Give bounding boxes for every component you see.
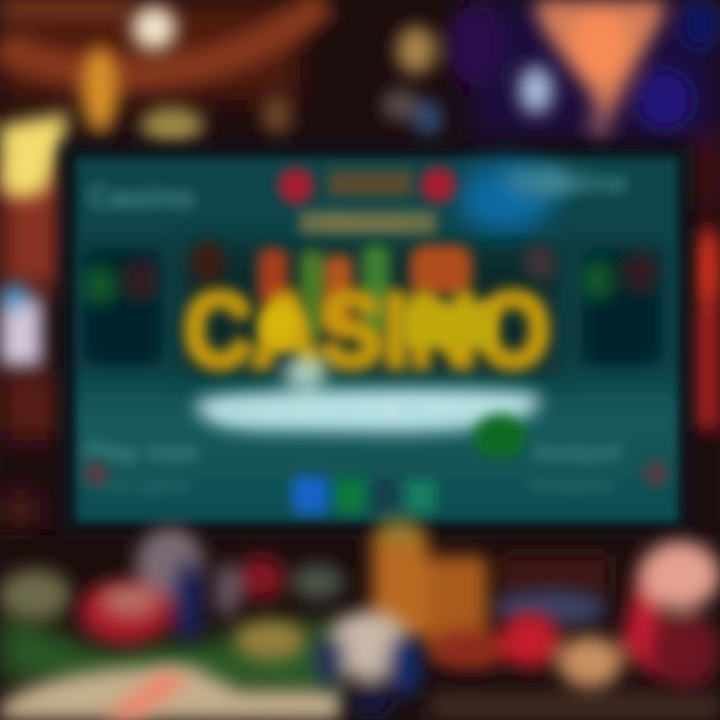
monitor screen xyxy=(60,145,690,535)
lower right text: Jackpot xyxy=(530,439,621,466)
blue glow at top right of screen xyxy=(459,164,551,236)
table surface xyxy=(0,535,720,720)
flame-shaped lamp xyxy=(535,0,720,140)
left side pink panel xyxy=(0,284,42,366)
header title xyxy=(300,170,436,238)
monitor screen: Online xyxy=(540,167,627,198)
orange chip stack xyxy=(372,518,488,656)
monitor screen: Free spins xyxy=(90,475,190,497)
figures above logo xyxy=(192,240,556,340)
ceiling lights xyxy=(82,5,553,143)
red chips at right xyxy=(430,541,720,688)
screen header text: Casino xyxy=(88,179,195,215)
ceiling arc xyxy=(0,0,325,73)
white glowing banner xyxy=(196,358,540,432)
lower left text: Play now xyxy=(85,436,198,466)
blue and white chips xyxy=(314,611,423,720)
green button xyxy=(474,414,526,458)
payment icons xyxy=(292,476,436,514)
header title: Bonus xyxy=(328,208,408,238)
red badges xyxy=(278,167,456,204)
right dark slot panel xyxy=(582,248,662,366)
star light at left xyxy=(0,112,70,200)
banner text: Welcome Bonus xyxy=(218,399,518,426)
left dark slot panel xyxy=(82,248,162,366)
monitor screen: Rewards xyxy=(530,475,613,497)
logo: CASINO: CASINO xyxy=(184,272,550,389)
casino chips xyxy=(79,527,344,660)
right side red panel xyxy=(695,224,720,430)
dark band behind logo xyxy=(180,245,560,375)
